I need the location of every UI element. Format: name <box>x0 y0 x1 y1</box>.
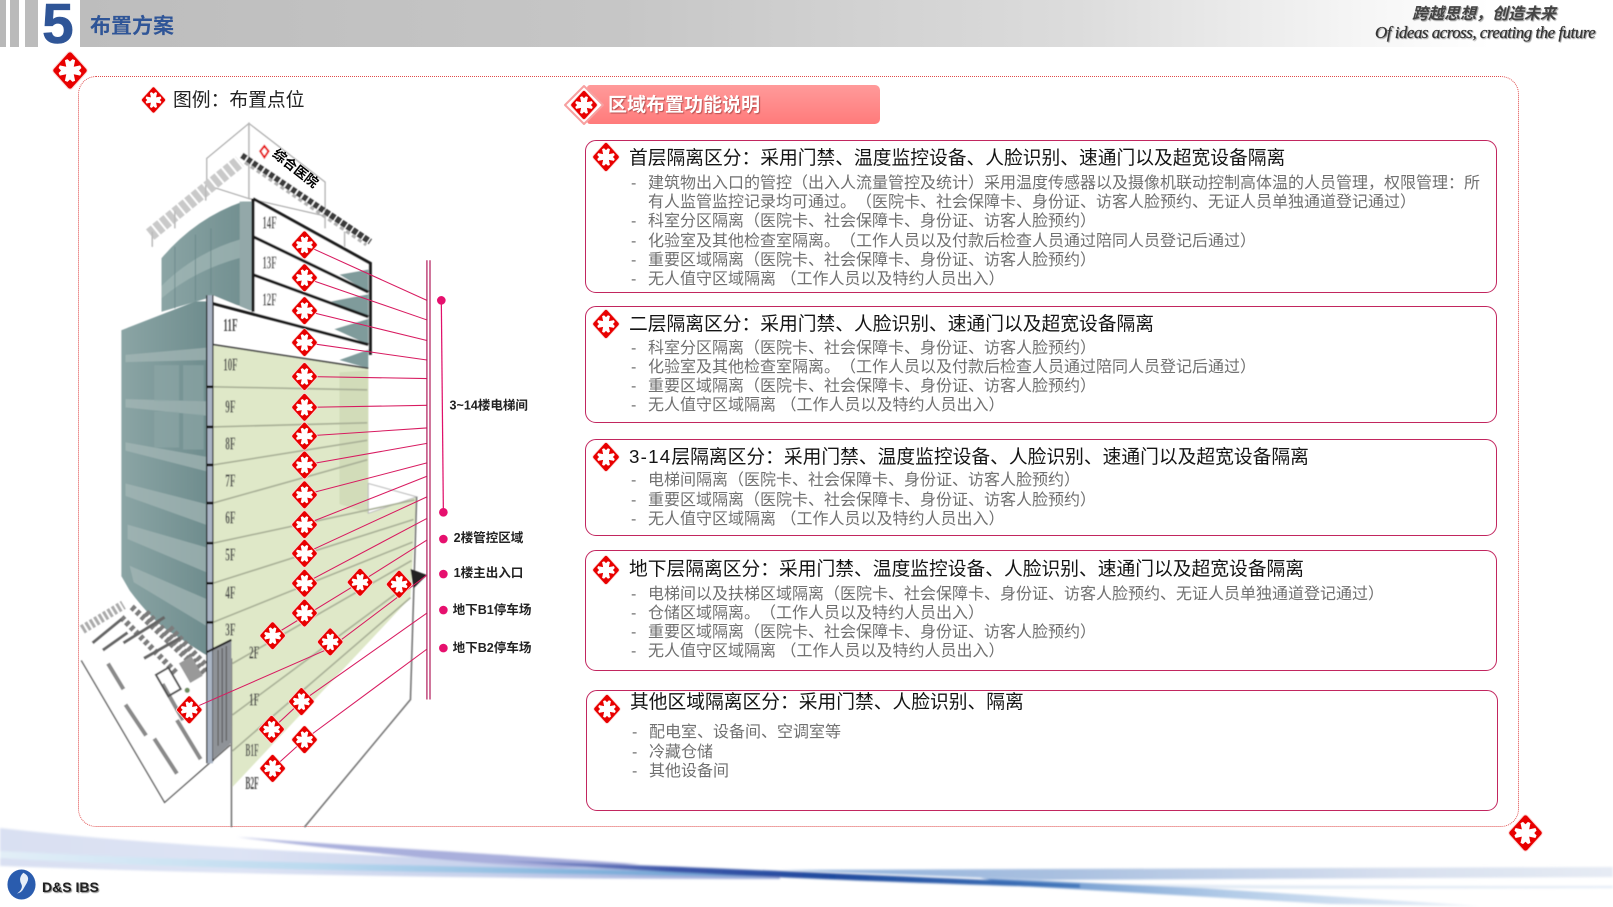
list: second floor: 科室分区隔离（医院卡、社会保障卡、身份证、访客人脸预约） <box>648 340 1096 357</box>
icon: floors 3-14 <box>592 442 620 472</box>
floor labels: 14F <box>262 212 277 232</box>
floor labels <box>223 212 277 793</box>
rooftop parapet <box>150 162 240 235</box>
footer logo <box>7 870 100 900</box>
upper tower floors <box>213 199 370 350</box>
panel: floors 3-14 <box>585 439 1497 536</box>
list: floors 3-14: 重要区域隔离（医院卡、社会保障卡、身份证、访客人脸预约） <box>648 492 1096 509</box>
list: floors 3-14: - <box>631 511 636 528</box>
floor labels: 8F <box>225 434 236 454</box>
floor labels: 4F <box>225 583 236 603</box>
list: first floor: - <box>631 252 636 269</box>
list: second floor: 无人值守区域隔离 （工作人员以及特约人员出入） <box>648 397 1004 414</box>
list: other areas: 冷藏仓储 <box>649 744 713 761</box>
icon: banner diamond <box>564 85 604 125</box>
list: basement: - <box>631 643 636 660</box>
list: second floor: 重要区域隔离（医院卡、社会保障卡、身份证、访客人脸预约） <box>648 378 1096 395</box>
heading: floors 3-14: 3-14层隔离区分：采用门禁、温度监控设备、人脸识别、速通门以及超宽设备隔离 <box>629 442 1309 469</box>
floor labels: 9F <box>225 397 236 417</box>
floor labels: 11F <box>223 315 238 335</box>
zone labels <box>439 397 532 655</box>
list: other areas: - <box>632 724 637 741</box>
list: floors 3-14: - <box>631 492 636 509</box>
list: other areas: - <box>632 763 637 780</box>
sign text: 综合医院 <box>270 145 322 191</box>
callout lines <box>189 245 427 768</box>
list: second floor: 化验室及其他检查室隔离。（工作人员以及付款后检查人员通过陪同人员登记后通过） <box>648 359 1256 376</box>
icon: first floor <box>592 142 620 172</box>
panel: basement <box>585 550 1497 671</box>
floor labels: 10F <box>223 354 238 374</box>
rooftop sign <box>207 123 325 216</box>
list: first floor: 有人监管监控记录均可通过。（医院卡、社会保障卡、身份证、访客人脸预约、无证人员单独通道登记通过） <box>648 194 1416 211</box>
list: basement: - <box>631 624 636 641</box>
icons: placement points <box>179 233 410 780</box>
icon: basement <box>592 555 620 585</box>
floor labels: 6F <box>225 508 236 528</box>
section banner <box>564 85 880 125</box>
list: first floor: 无人值守区域隔离 （工作人员以及特约人员出入） <box>648 271 1004 288</box>
icon: second floor <box>592 309 620 339</box>
icon: frame corner bottom right <box>1508 814 1543 852</box>
floor labels: B1F <box>245 740 259 760</box>
company name: D&S IBS <box>42 879 99 895</box>
elevator range marker <box>437 296 448 517</box>
list: basement: 无人值守区域隔离 （工作人员以及特约人员出入） <box>648 643 1004 660</box>
legend <box>141 85 304 114</box>
banner bar <box>587 85 880 124</box>
floor labels: 13F <box>262 252 277 272</box>
list: basement: 重要区域隔离（医院卡、社会保障卡、身份证、访客人脸预约） <box>648 624 1096 641</box>
floor labels: 1F <box>249 690 259 710</box>
panel: other areas <box>586 690 1498 811</box>
green floors <box>213 345 417 787</box>
list: first floor: 科室分区隔离（医院卡、社会保障卡、身份证、访客人脸预约） <box>648 213 1096 230</box>
list: first floor: - <box>631 271 636 288</box>
section title: 布置方案 <box>90 15 174 38</box>
list: second floor <box>631 339 1256 414</box>
zone labels: 1楼主出入口 <box>454 565 523 580</box>
list: other areas <box>632 723 841 780</box>
list: floors 3-14: - <box>631 472 636 489</box>
list: floors 3-14: 无人值守区域隔离 （工作人员以及特约人员出入） <box>648 511 1004 528</box>
list: first floor: 建筑物出入口的管控（出入人流量管控及统计）采用温度传感器以及摄像机联动控制高体温的人员管理，权限管理：所 <box>648 169 1480 193</box>
icon: company logo <box>7 870 36 900</box>
icon: other areas <box>593 694 621 724</box>
outer dotted frame <box>78 76 1519 827</box>
zone labels: 地下B2停车场 <box>453 640 532 655</box>
list: floors 3-14 <box>631 471 1096 528</box>
list: second floor: - <box>631 340 636 357</box>
list: first floor: 重要区域隔离（医院卡、社会保障卡、身份证、访客人脸预约） <box>648 252 1096 269</box>
zone labels: 地下B1停车场 <box>453 602 532 617</box>
list: first floor <box>631 169 1480 288</box>
list: other areas: 配电室、设备间、空调室等 <box>649 724 841 741</box>
list: other areas: 其他设备间 <box>649 763 729 780</box>
floor labels: 2F <box>249 642 259 662</box>
upper tower glass <box>162 202 252 312</box>
site plan <box>81 602 230 802</box>
heading: other areas: 其他区域隔离区分：采用门禁、人脸识别、隔离 <box>630 687 1024 714</box>
corner column <box>207 295 231 763</box>
floor labels: 7F <box>225 471 236 491</box>
basement walls <box>231 497 417 827</box>
icon: legend marker <box>141 86 166 114</box>
floor labels: B2F <box>245 773 259 793</box>
list: basement: - <box>631 605 636 622</box>
floor labels: 3F <box>225 620 236 640</box>
heading: second floor: 二层隔离区分：采用门禁、人脸识别、速通门以及超宽设备隔离 <box>629 309 1154 336</box>
list: other areas: - <box>632 744 637 761</box>
header gradient band <box>80 0 1613 47</box>
list: second floor: - <box>631 397 636 414</box>
tagline chinese: 跨越思想，创造未来 <box>1412 6 1556 23</box>
header bar <box>0 0 1597 56</box>
list: first floor: - <box>631 175 636 192</box>
legend text: 图例：布置点位 <box>173 85 304 112</box>
list: second floor: - <box>631 359 636 376</box>
floor labels: 5F <box>225 545 236 565</box>
entrance canopy <box>410 569 427 588</box>
zone labels: 2楼管控区域 <box>454 530 524 545</box>
list: second floor: - <box>631 378 636 395</box>
list: basement: 仓储区域隔离。（工作人员以及特约人员出入） <box>648 605 984 622</box>
list: basement: 电梯间以及扶梯区域隔离（医院卡、社会保障卡、身份证、访客人脸预约、无证人员单独通道登记通过） <box>648 586 1384 603</box>
tagline english: Of ideas across, creating the future <box>1375 23 1595 42</box>
list: first floor: - <box>631 233 636 250</box>
heading: basement: 地下层隔离区分：采用门禁、温度监控设备、人脸识别、速通门以及超宽设备隔离 <box>629 554 1304 581</box>
icon: frame corner top left <box>52 51 88 90</box>
heading: first floor: 首层隔离区分：采用门禁、温度监控设备、人脸识别、速通门以及超宽设备隔离 <box>629 143 1285 170</box>
panel: second floor <box>585 306 1497 423</box>
floor labels: 12F <box>262 290 277 310</box>
header stripes <box>0 0 38 47</box>
zone labels: 3~14楼电梯间 <box>450 397 528 412</box>
lower glass block <box>121 301 207 655</box>
panel: first floor <box>585 140 1497 293</box>
footer swoosh <box>0 828 1613 906</box>
list: first floor: 化验室及其他检查室隔离。（工作人员以及付款后检查人员通过陪同人员登记后通过） <box>648 233 1256 250</box>
list: floors 3-14: 电梯间隔离（医院卡、社会保障卡、身份证、访客人脸预约） <box>648 472 1080 489</box>
building drawing <box>81 123 427 827</box>
vertical rail <box>427 260 430 700</box>
list: first floor: - <box>631 213 636 230</box>
list: basement: - <box>631 586 636 603</box>
banner text: 区域布置功能说明 <box>608 95 760 116</box>
list: basement <box>631 585 1384 660</box>
